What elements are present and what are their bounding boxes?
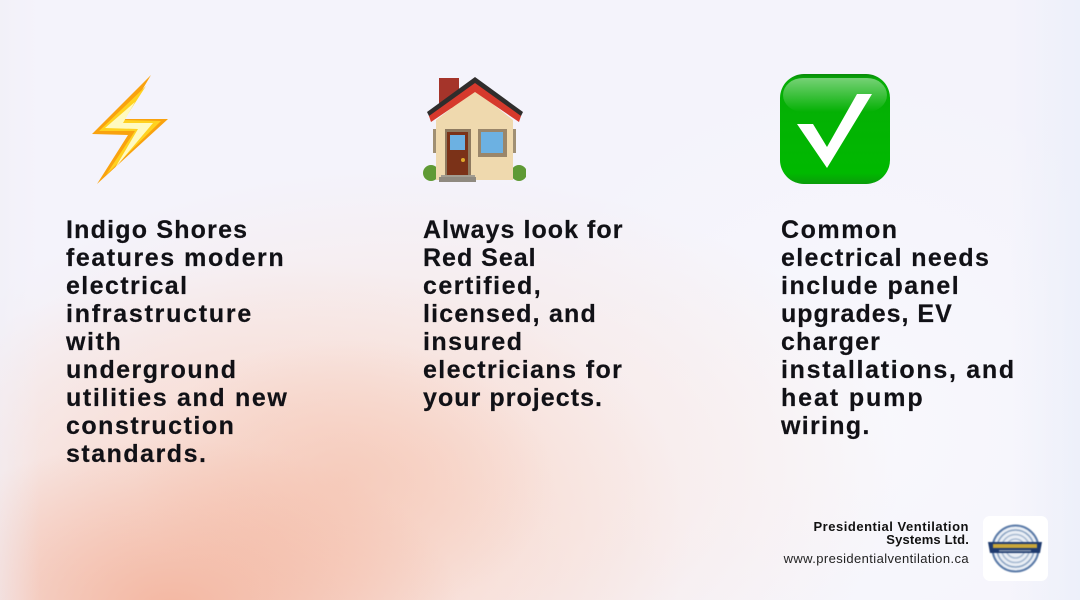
text: common electrical needs: heat pump xyxy=(781,384,924,412)
text: electrical infrastructure: infrastructure xyxy=(66,300,253,328)
icon: green check mark xyxy=(780,74,890,184)
text: electrical infrastructure: construction xyxy=(66,412,235,440)
text: certified electricians: licensed, and xyxy=(423,300,597,328)
text: common electrical needs xyxy=(780,216,1016,440)
text: certified electricians: Always look for xyxy=(423,216,624,244)
text: electrical infrastructure xyxy=(66,216,289,468)
company name and website: Presidential Ventilation xyxy=(813,519,969,534)
text: certified electricians xyxy=(423,216,624,412)
text: common electrical needs: charger xyxy=(781,328,881,356)
text: certified electricians: insured xyxy=(423,328,523,356)
company name and website: Systems Ltd. xyxy=(886,532,969,547)
icon: lightning bolt xyxy=(92,75,168,184)
text: common electrical needs: installations, and xyxy=(781,356,1016,384)
text: certified electricians: certified, xyxy=(423,272,542,300)
text: electrical infrastructure: electrical xyxy=(66,272,188,300)
text: electrical infrastructure: underground xyxy=(66,356,237,384)
text: common electrical needs: wiring. xyxy=(781,412,871,440)
text: electrical infrastructure: features modern xyxy=(66,244,285,272)
text: certified electricians: Red Seal xyxy=(423,244,537,272)
text: common electrical needs: electrical needs xyxy=(781,244,990,272)
text: certified electricians: your projects. xyxy=(423,384,603,412)
text: electrical infrastructure: Indigo Shores xyxy=(66,216,248,244)
text: certified electricians: electricians for xyxy=(423,356,623,384)
company name and website: www.presidentialventilation.ca xyxy=(784,551,969,566)
text: common electrical needs: Common xyxy=(781,216,899,244)
icon: house xyxy=(423,77,526,182)
logo badge xyxy=(983,516,1048,581)
text: common electrical needs: upgrades, EV xyxy=(781,300,953,328)
text: common electrical needs: include panel xyxy=(781,272,960,300)
text: electrical infrastructure: with xyxy=(66,328,122,356)
text: electrical infrastructure: utilities and new xyxy=(66,384,289,412)
company name and website xyxy=(784,519,969,566)
text: electrical infrastructure: standards. xyxy=(66,440,207,468)
